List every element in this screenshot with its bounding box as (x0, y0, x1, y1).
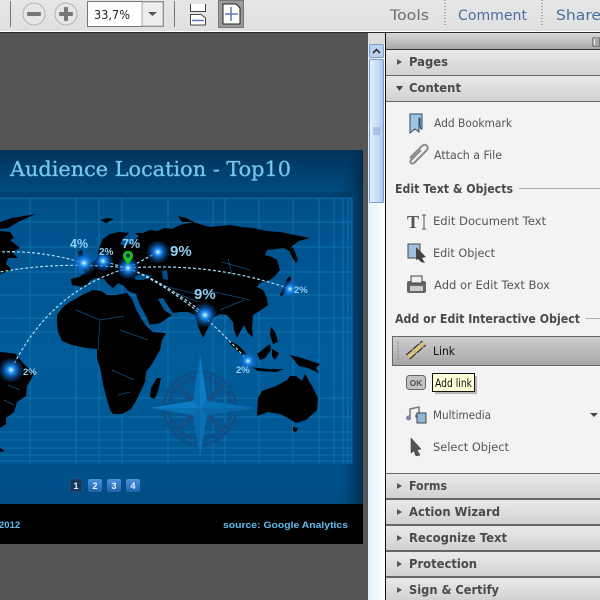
Greenland fragment (0, 214, 36, 229)
item: Multimedia (406, 407, 598, 423)
item: Multimedia: Multimedia (433, 408, 491, 422)
item: Edit Document Text (407, 212, 546, 232)
scroll thumb (370, 60, 384, 202)
world map panel (0, 192, 352, 464)
Indonesia (257, 344, 271, 360)
item: Link selected (392, 336, 600, 366)
zoom level field (88, 2, 164, 26)
item: Add Bookmark: Add Bookmark (434, 116, 512, 130)
section: Protection (386, 552, 600, 578)
percentage labels: 2% (294, 285, 308, 296)
tooltip: Add link: Add link (435, 376, 472, 390)
item: Attach a File: Attach a File (434, 148, 502, 162)
UK (78, 250, 83, 257)
Arctic islands (178, 216, 194, 222)
toolbar tabs: Comment (458, 8, 528, 24)
item: Edit Object (408, 244, 495, 263)
tooltip: Add link (432, 374, 477, 394)
section: Protection: Protection (409, 557, 477, 571)
title: Audience Location - Top10 (9, 157, 291, 181)
section: Pages: Pages (409, 55, 448, 69)
connection arcs (0, 252, 290, 370)
section: Action Wizard (386, 500, 600, 526)
section: Content (386, 76, 600, 102)
percentage labels (23, 237, 308, 378)
percentage labels: 9% (194, 286, 216, 303)
Sakhalin (289, 247, 298, 263)
continents (0, 214, 320, 452)
pagination buttons: 2 (92, 481, 98, 491)
New Guinea (290, 355, 320, 373)
country borders (4, 258, 250, 405)
Australia (257, 374, 318, 423)
section: Pages (386, 50, 600, 76)
percentage labels: 2% (236, 365, 250, 376)
document page: Audience Location infographic (0, 150, 363, 544)
compass rose (150, 355, 255, 457)
scroll up button (370, 44, 384, 58)
item: Add or Edit Text Box (407, 276, 550, 293)
pagination buttons: 4 (130, 481, 136, 491)
North America fragment (0, 231, 20, 274)
item: Select Object: Select Object (433, 440, 509, 454)
item: Add or Edit Text Box: Add or Edit Text Box (434, 278, 550, 292)
item: Select Object (411, 438, 509, 456)
fit width icon (190, 4, 206, 25)
tools sidebar (385, 33, 600, 600)
section: Sign & Certify (386, 578, 600, 600)
Japan (280, 276, 291, 296)
percentage labels: 2% (99, 247, 114, 258)
green location pin (123, 251, 133, 265)
percentage labels: 9% (170, 243, 192, 260)
section: Content: Content (409, 81, 461, 95)
Svalbard (100, 218, 114, 223)
section: Forms (385, 473, 600, 500)
heading: Edit Text & Objects: Edit Text & Objects (395, 182, 513, 196)
sidebar top bar (386, 33, 600, 50)
South America (0, 352, 34, 428)
section: Sign & Certify: Sign & Certify (409, 583, 499, 597)
item: OK button icon (406, 376, 426, 390)
toolbar tabs: Share (556, 8, 600, 24)
section: Recognize Text: Recognize Text (409, 531, 507, 545)
percentage labels: 7% (122, 237, 140, 251)
item: Edit Document Text: Edit Document Text (433, 214, 546, 228)
item: OK button icon: OK (410, 378, 423, 388)
percentage labels: 4% (70, 237, 88, 251)
zoom in button (55, 3, 77, 25)
item: Add Bookmark (410, 114, 512, 133)
Eurasia (71, 222, 310, 338)
percentage labels: 2% (23, 367, 37, 378)
toolbar tabs: Tools (389, 8, 429, 24)
item: Attach a File (410, 145, 502, 164)
item: Edit Document Text: T (407, 212, 419, 232)
item: Edit Object: Edit Object (433, 246, 495, 260)
heading: Add or Edit Interactive Object: Add or Edit Interactive Object (395, 312, 580, 326)
item: Link selected: Link (433, 344, 455, 358)
zoom out button (23, 3, 45, 25)
zoom level field: 33,7% (94, 7, 130, 22)
footer bar: source: Google Analytics (223, 520, 348, 531)
footer bar (0, 504, 363, 544)
pagination buttons (70, 479, 140, 492)
pagination buttons: 3 (111, 481, 117, 491)
section: Action Wizard: Action Wizard (409, 505, 500, 519)
pagination buttons: 1 (73, 481, 79, 491)
toolbar (0, 0, 600, 33)
section: Forms: Forms (409, 479, 447, 493)
location nodes (0, 240, 300, 383)
Madagascar (150, 378, 161, 399)
Africa (57, 290, 166, 414)
section: Recognize Text (386, 526, 600, 552)
vertical scrollbar (363, 33, 385, 600)
fit page icon (218, 0, 244, 28)
inland seas (134, 270, 168, 280)
toolbar tabs (389, 0, 600, 27)
